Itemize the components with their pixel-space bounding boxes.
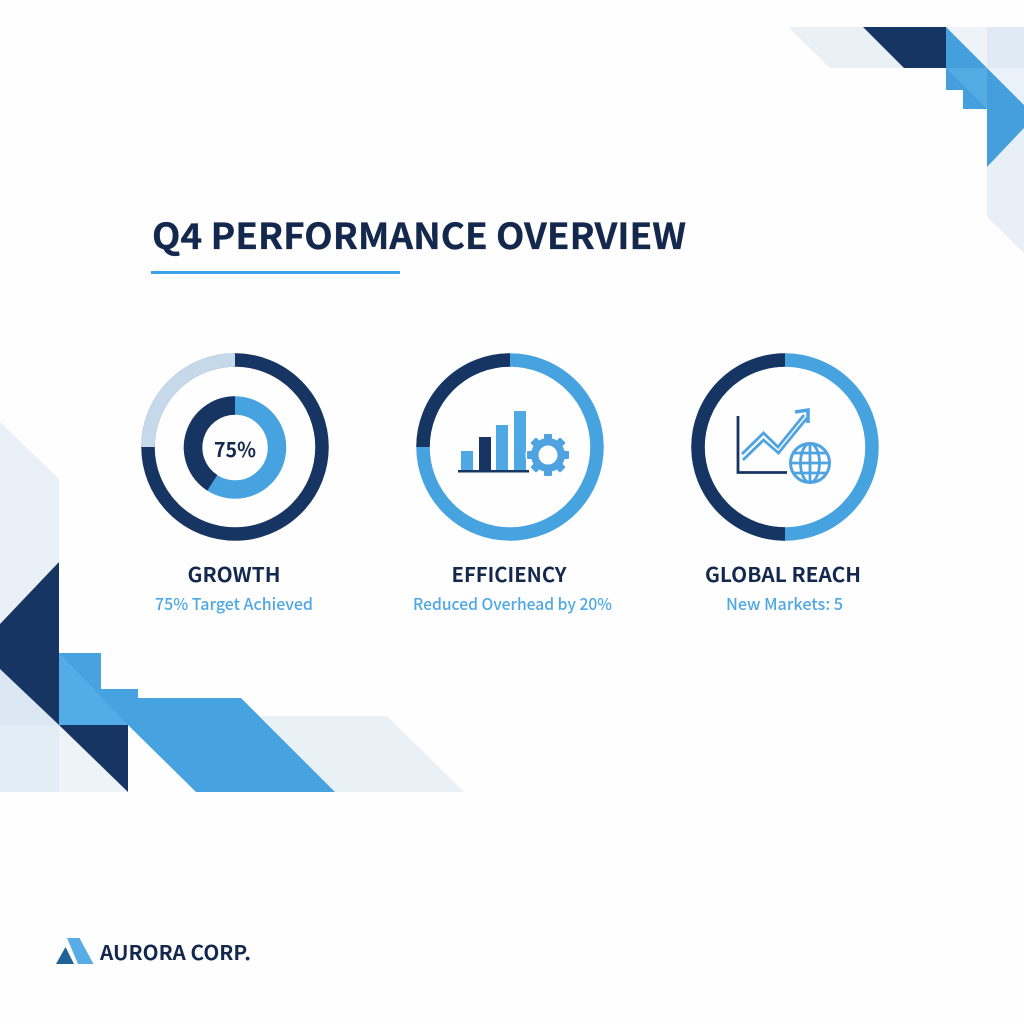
icon: trend arrow <box>742 410 808 460</box>
panel: growth <box>148 360 322 615</box>
chart: inner donut <box>193 406 277 490</box>
icon: bar chart <box>458 411 529 472</box>
decoration: top right geometric corner <box>788 27 1024 253</box>
title: Q4 PERFORMANCE OVERVIEW <box>152 209 686 260</box>
panel: efficiency <box>413 360 612 615</box>
heading: growth: GROWTH <box>188 559 280 588</box>
title underline <box>151 271 400 274</box>
chart: outer ring 75 percent <box>148 360 322 534</box>
heading: efficiency: EFFICIENCY <box>452 559 567 588</box>
icon: globe <box>790 443 830 483</box>
chart: efficiency ring <box>423 360 597 534</box>
caption: global reach: New Markets: 5 <box>726 591 843 615</box>
decoration: bottom left geometric corner <box>0 422 464 792</box>
logo wordmark: AURORA CORP. <box>99 937 251 966</box>
panel: global reach <box>698 360 872 615</box>
caption: growth: 75% Target Achieved <box>155 591 313 615</box>
icon: gear <box>526 432 570 478</box>
donut value: 75% <box>214 433 256 463</box>
heading: global reach: GLOBAL REACH <box>705 559 861 588</box>
icon: logo mark <box>56 938 94 964</box>
logo <box>56 937 251 966</box>
chart: global reach ring <box>698 360 872 534</box>
caption: efficiency: Reduced Overhead by 20% <box>413 591 612 615</box>
icon: axes <box>738 416 787 472</box>
